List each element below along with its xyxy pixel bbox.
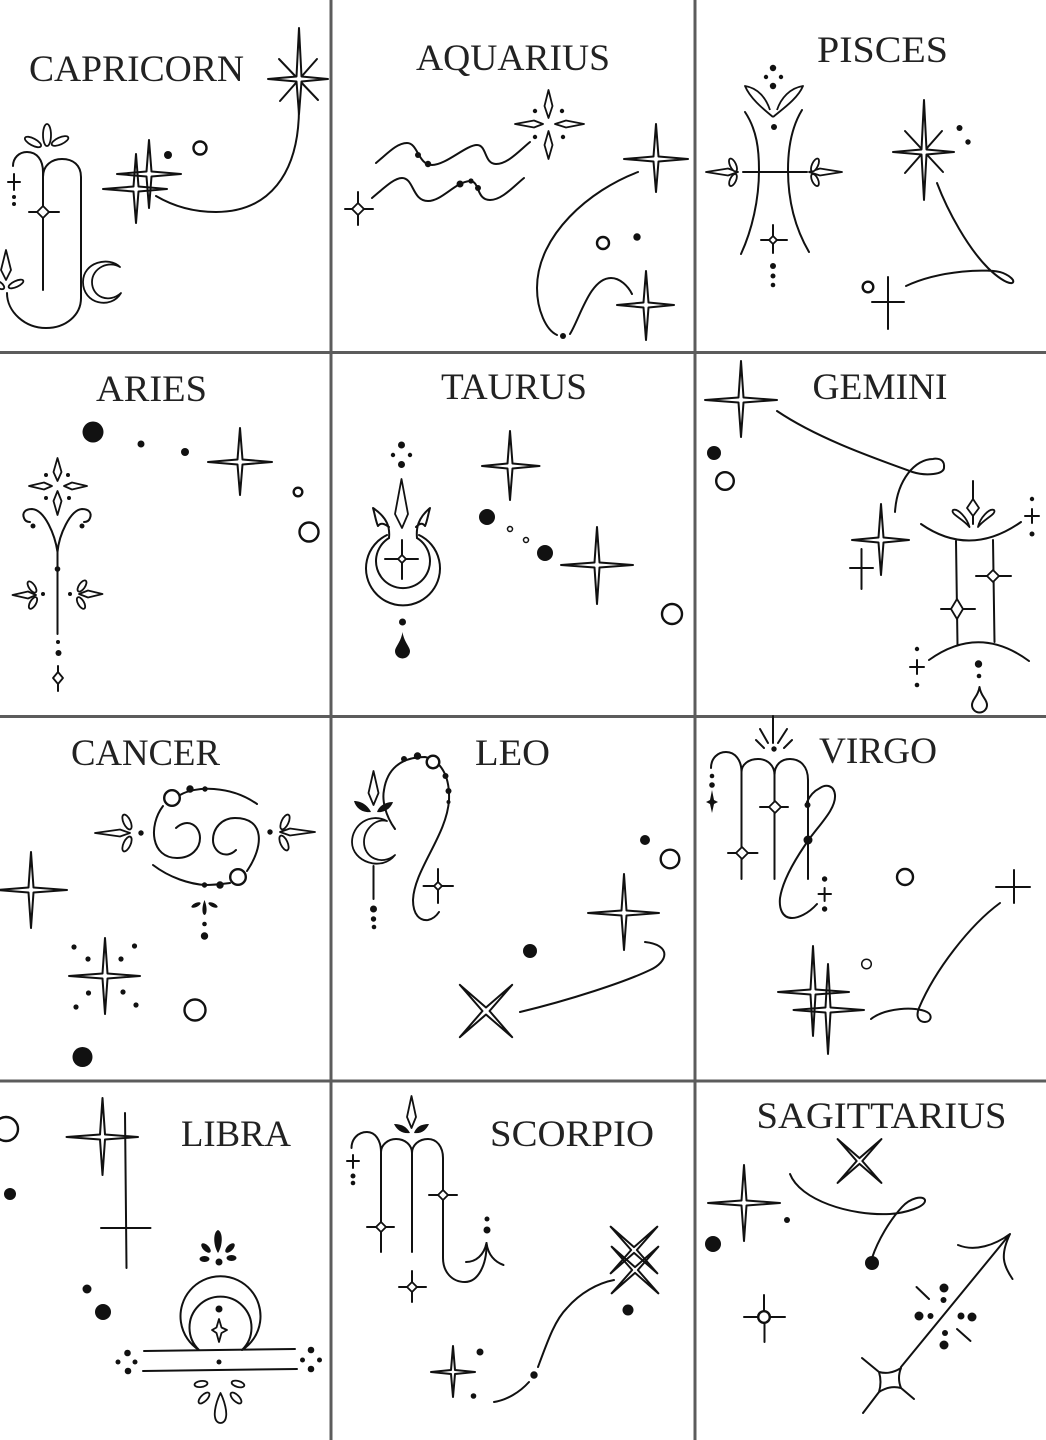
title: Scorpio: SCORPIO [490,1114,654,1155]
panel: Taurus [366,367,682,658]
constellation: Scorpio [431,1203,682,1402]
panel: Capricorn [0,28,328,328]
panel: Virgo [706,716,1030,1054]
title: Virgo: VIRGO [819,731,937,772]
constellation: Pisces [863,100,1013,329]
title: Libra: LIBRA [181,1114,291,1155]
constellation: Aquarius [537,124,688,340]
panel: Cancer [0,733,315,1067]
constellation: Cancer [0,852,206,1067]
title: Aquarius: AQUARIUS [416,38,610,79]
constellation: Sagittarius [705,1117,925,1342]
panel: Leo [352,733,679,1063]
panel: Aquarius [345,38,688,340]
panel: Sagittarius [705,1096,1012,1413]
title: Capricorn: CAPRICORN [29,49,244,90]
constellation: Libra [0,1098,150,1320]
zodiac glyph: Sagittarius [862,1234,1012,1413]
constellation: Virgo [778,869,1030,1054]
title: Leo: LEO [475,733,550,774]
constellation: Aries [82,422,318,542]
zodiac glyph: Aries [12,458,102,691]
panel: Libra [0,1098,322,1423]
title: Sagittarius: SAGITTARIUS [756,1096,1006,1137]
title: Cancer: CANCER [71,733,220,774]
zodiac glyph: Libra [116,1230,322,1423]
zodiac glyph: Capricorn [0,124,121,328]
title: Gemini: GEMINI [812,367,948,408]
panel: Gemini [705,361,1039,713]
zodiac glyph: Virgo [706,716,835,918]
zodiac glyph: Pisces [706,65,842,287]
zodiac glyph: Leo [352,752,453,929]
zodiac glyph: Gemini [910,481,1039,713]
zodiac glyph: Taurus [366,442,440,658]
title: Aries: ARIES [96,369,207,410]
constellation: Gemini [705,361,944,589]
panel: Aries [12,369,318,691]
panel: Pisces [706,30,1013,329]
constellation: Capricorn [103,28,328,223]
zodiac glyph: Aquarius [345,90,584,225]
title: Taurus: TAURUS [441,367,587,408]
panel: Scorpio [347,1096,682,1402]
zodiac glyph: Cancer [95,785,315,940]
title: Pisces: PISCES [817,30,948,71]
constellation: Leo [434,835,679,1063]
constellation: Taurus [479,431,682,624]
zodiac glyph: Scorpio [347,1096,504,1302]
